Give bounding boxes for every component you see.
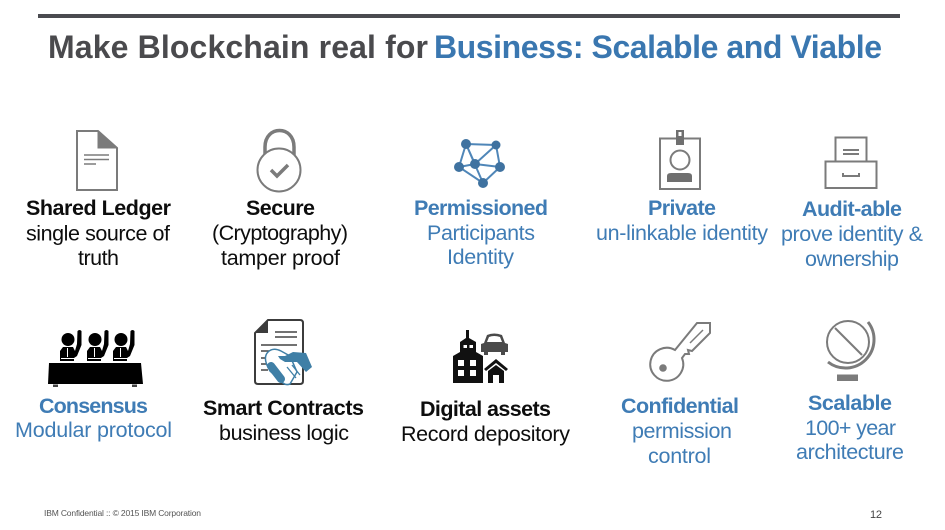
text: scalable: Scalable: [808, 391, 892, 415]
text: consensus: [15, 394, 172, 442]
text: audit-able: ownership: [805, 247, 899, 271]
text: confidential: control: [648, 444, 711, 468]
icon: building, car and house: [453, 330, 508, 383]
text: shared ledger: Shared Ledger: [26, 196, 172, 220]
item: secure: [212, 130, 348, 270]
item: private: [596, 130, 768, 245]
text: private: un-linkable identity: [596, 221, 768, 245]
text: secure: [212, 196, 348, 270]
text: scalable: [796, 391, 904, 464]
text: permissioned: Identity: [447, 245, 514, 269]
text: smart contracts: business logic: [219, 421, 349, 445]
icon: network: [454, 139, 505, 188]
icon: document: [77, 131, 117, 190]
title: [48, 29, 882, 65]
icon: globe: [827, 321, 874, 381]
text: consensus: Modular protocol: [15, 418, 172, 442]
text: permissioned: Participants: [427, 221, 535, 245]
icon: voters at table: [48, 330, 143, 387]
text: permissioned: [414, 196, 548, 269]
text: digital assets: Digital assets: [420, 397, 551, 421]
text: confidential: permission: [632, 419, 732, 443]
text: permissioned: Permissioned: [414, 196, 548, 220]
footer: confidentiality note: IBM Confidential :: © 2015 IBM Corporation: [44, 508, 201, 518]
text: audit-able: Audit-able: [802, 197, 902, 221]
item: confidential: [621, 323, 739, 468]
text: private: [596, 196, 768, 245]
icon: padlock: [258, 130, 300, 192]
item: audit-able: [781, 138, 923, 271]
item: shared ledger: [26, 131, 172, 270]
text: shared ledger: truth: [78, 246, 119, 270]
title: Business: Scalable and Viable: [434, 29, 882, 65]
text: scalable: architecture: [796, 440, 904, 464]
item: digital assets: [401, 330, 570, 446]
text: digital assets: Record depository: [401, 422, 570, 446]
icon: file drawer: [826, 138, 876, 188]
text: secure: tamper proof: [221, 246, 340, 270]
text: digital assets: [401, 397, 570, 446]
text: shared ledger: single source of: [26, 222, 170, 246]
icon: contract and handshake: [255, 320, 312, 385]
text: private: Private: [648, 196, 716, 220]
text: scalable: 100+ year: [805, 416, 896, 440]
text: secure: (Cryptography): [212, 221, 348, 245]
item: scalable: [796, 321, 904, 464]
title: Make Blockchain real for: [48, 29, 428, 65]
icon: id badge: [660, 130, 700, 189]
text: audit-able: prove identity &: [781, 222, 923, 246]
text: audit-able: [781, 197, 923, 271]
text: shared ledger: [26, 196, 172, 270]
text: consensus: Consensus: [39, 394, 148, 418]
icon: key: [650, 323, 710, 381]
text: smart contracts: [203, 396, 364, 445]
text: secure: Secure: [246, 196, 315, 220]
text: confidential: Confidential: [621, 394, 739, 418]
item: permissioned: [414, 139, 548, 269]
text: smart contracts: Smart Contracts: [203, 396, 364, 420]
text: confidential: [621, 394, 739, 468]
item: consensus: [15, 330, 172, 442]
item: smart contracts: [203, 320, 364, 445]
footer: page number: 12: [870, 509, 882, 521]
